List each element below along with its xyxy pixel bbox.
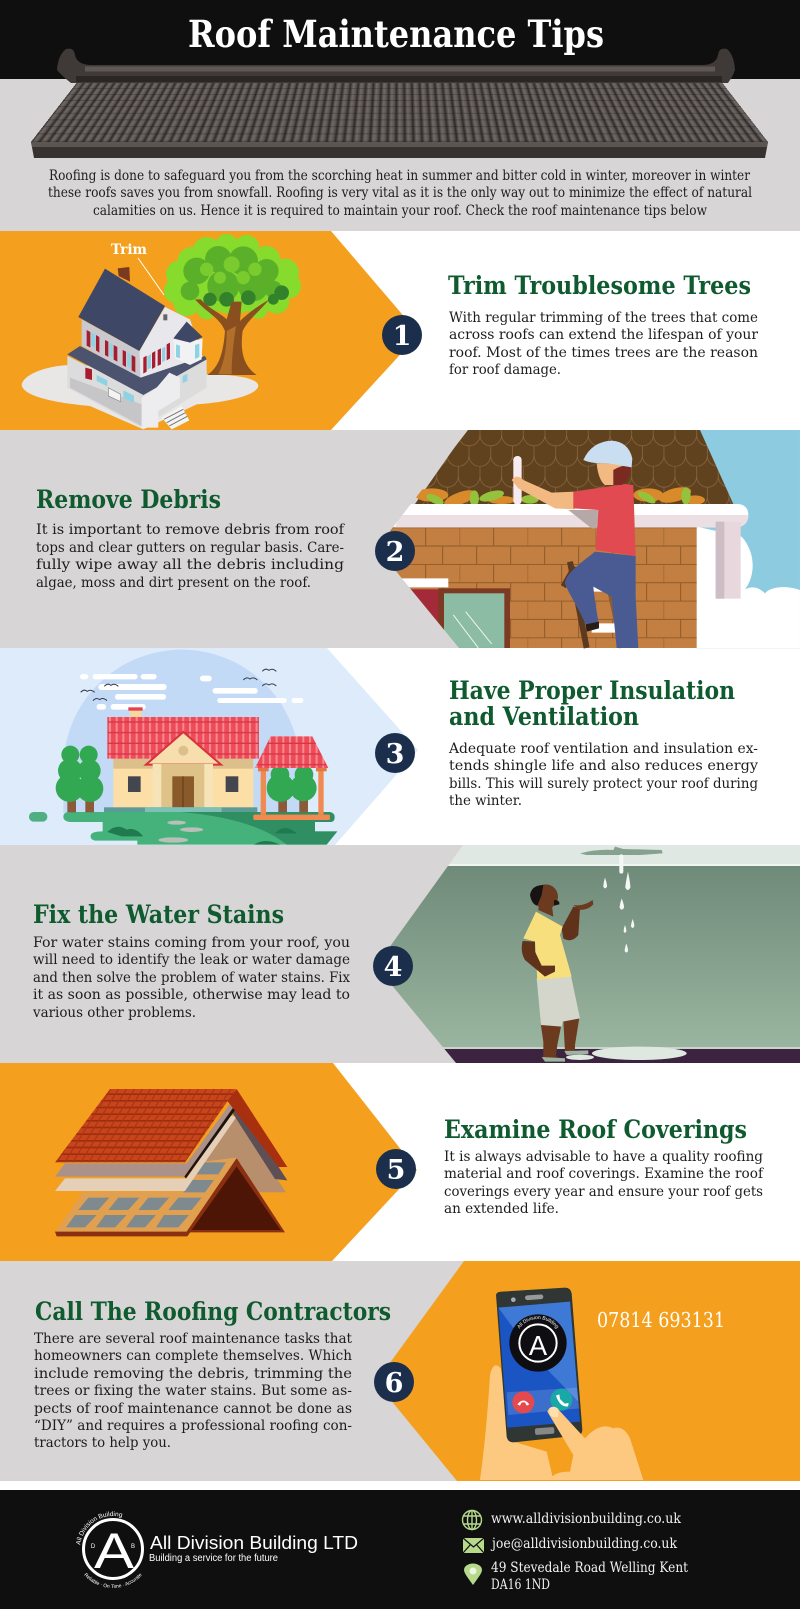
- text 1: With regular trimming of the trees that come: [449, 310, 758, 326]
- text 3: the winter.: [449, 793, 522, 809]
- roof ridge and fascia: [31, 48, 768, 158]
- text 2: [36, 522, 346, 591]
- illustration: house and tree: [22, 234, 301, 429]
- text 5: material and roof coverings. Examine the roof: [444, 1166, 765, 1182]
- illustration: phone in hands: [480, 1288, 644, 1480]
- intro text: calamities on us. Hence it is required to maintain your roof. Check the roof maintenance tips below: [93, 203, 708, 219]
- panel: tip 6 orange background: [370, 1261, 800, 1481]
- badge 1: 1: [393, 321, 411, 352]
- icon: map pin: [464, 1564, 482, 1585]
- badge 6: 6: [385, 1368, 403, 1399]
- text 5: an extended life.: [444, 1201, 559, 1217]
- panel: tip 2 grey chevron: [0, 430, 468, 648]
- heading 1: Trim Troublesome Trees: [448, 271, 751, 300]
- text 2: fully wipe away all the debris including: [36, 557, 344, 573]
- heading 2: Remove Debris: [36, 485, 221, 514]
- website: www.alldivisionbuilding.co.uk: [491, 1511, 682, 1527]
- heading 3: [449, 676, 735, 731]
- panel: tip 4 grey chevron: [0, 845, 463, 1063]
- badge 4: [373, 946, 413, 986]
- label: trim: [111, 242, 164, 295]
- company name: All Division Building LTD: [150, 1533, 358, 1553]
- text 2: algae, moss and dirt present on the roof.: [36, 575, 311, 591]
- illustration: phone in hands: All Division Building: [518, 1316, 558, 1329]
- text 6: tractors to help you.: [34, 1435, 171, 1451]
- text 4: will need to identify the leak or water damage: [33, 952, 350, 968]
- text 4: it as soon as possible, otherwise may lead to: [33, 987, 350, 1003]
- footer logo: [76, 1511, 144, 1588]
- footer logo: Reliable · On Time · Accurate: [84, 1572, 142, 1588]
- heading 5: Examine Roof Coverings: [444, 1115, 747, 1144]
- panel: tip 5 orange chevron: [0, 1063, 417, 1261]
- text 5: [444, 1149, 765, 1217]
- text 4: [32, 935, 350, 1021]
- badge 5: 5: [387, 1155, 405, 1186]
- company name: Building a service for the future: [149, 1553, 278, 1564]
- text 5: coverings every year and ensure your roof gets: [444, 1184, 763, 1200]
- text 6: pects of roof maintenance cannot be done as: [34, 1401, 352, 1417]
- illustration: worker cleaning gutter: [388, 430, 800, 648]
- footer logo: A: [94, 1523, 135, 1579]
- text 3: Adequate roof ventilation and insulation ex-: [448, 741, 758, 757]
- badge 5: [376, 1149, 416, 1189]
- text 6: homeowners can complete themselves. Which: [34, 1348, 352, 1364]
- text 6: trees or fixing the water stains. But some as-: [34, 1383, 352, 1399]
- heading 3: and Ventilation: [449, 702, 639, 731]
- title: Roof Maintenance Tips: [188, 12, 604, 56]
- phone number: 07814 693131: [597, 1308, 725, 1332]
- company name: [149, 1533, 358, 1564]
- address: 49 Stevedale Road Welling Kent: [491, 1560, 689, 1576]
- text 3: tends shingle life and also reduces energy: [449, 758, 759, 774]
- text 6: There are several roof maintenance tasks that: [34, 1331, 352, 1347]
- text 4: For water stains coming from your roof, you: [33, 935, 350, 951]
- panel: tip 3 light blue chevron: [0, 648, 418, 845]
- text 1: roof. Most of the times trees are the reason: [449, 345, 758, 361]
- panel: tip 1 orange chevron: [0, 231, 419, 430]
- text 2: tops and clear gutters on regular basis. Care-: [36, 540, 344, 556]
- illustration: phone in hands: A: [529, 1330, 548, 1361]
- panel: tip 6 grey chevron: [0, 1261, 464, 1481]
- footer logo: B: [131, 1544, 135, 1550]
- text 5: It is always advisable to have a quality roofing: [444, 1149, 763, 1165]
- text 6: include removing the debris, trimming the: [34, 1366, 352, 1382]
- text 1: across roofs can extend the lifespan of your: [449, 327, 758, 343]
- heading 3: Have Proper Insulation: [449, 676, 735, 705]
- badge 1: [382, 315, 422, 355]
- heading 6: Call The Roofing Contractors: [35, 1297, 391, 1326]
- text 6: “DIY” and requires a professional roofing con-: [34, 1418, 352, 1434]
- illustration: house with red roof: [29, 650, 337, 845]
- text 1: [449, 310, 758, 378]
- email: joe@alldivisionbuilding.co.uk: [490, 1536, 678, 1552]
- text 1: for roof damage.: [449, 362, 561, 378]
- illustration: roof layers: [55, 1089, 287, 1236]
- text 3: bills. This will surely protect your roof during: [449, 776, 758, 792]
- footer band: [0, 1490, 800, 1609]
- header band: [0, 0, 800, 79]
- roof tiles: [31, 83, 768, 142]
- text 6: [34, 1331, 352, 1451]
- intro text: [48, 168, 752, 219]
- heading 4: Fix the Water Stains: [33, 900, 284, 929]
- address: DA16 1ND: [491, 1577, 550, 1593]
- label: trim: Trim: [111, 242, 147, 258]
- badge 3: 3: [386, 739, 404, 770]
- text 2: It is important to remove debris from roof: [36, 522, 346, 538]
- badge 2: 2: [386, 537, 404, 568]
- footer logo: All Division Building: [76, 1511, 122, 1545]
- icon: globe: [462, 1510, 482, 1530]
- text 4: and then solve the problem of water stains. Fix: [33, 970, 350, 986]
- badge 2: [375, 531, 415, 571]
- roof graphic: [31, 48, 768, 158]
- icon: envelope: [463, 1538, 484, 1553]
- address: [491, 1560, 689, 1593]
- text 4: various other problems.: [32, 1005, 196, 1021]
- illustration: man under leak: [522, 847, 687, 1062]
- illustration: water leak background: [370, 845, 800, 1063]
- footer logo: D: [91, 1544, 96, 1550]
- text 3: [448, 741, 759, 809]
- badge 3: [375, 733, 415, 773]
- badge 4: 4: [384, 952, 402, 983]
- badge 6: [374, 1362, 414, 1402]
- intro panel: [0, 79, 800, 231]
